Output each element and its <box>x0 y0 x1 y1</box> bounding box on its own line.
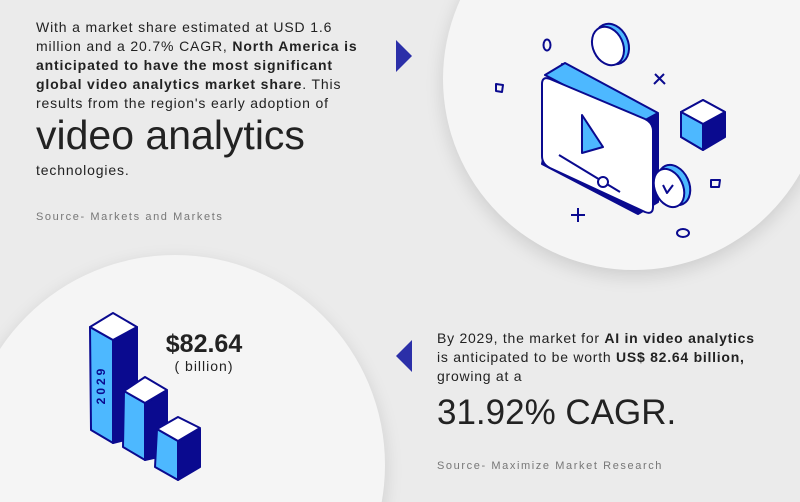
circle: bottom left <box>0 255 385 502</box>
source: Markets and Markets: Source- Markets and Markets <box>36 211 223 223</box>
text block: North America <box>36 19 358 178</box>
text block: AI in video analytics: By 2029, the market for AI in video analytics <box>437 330 755 346</box>
arrow: left pointing <box>396 340 412 372</box>
text block: North America: global video analytics market share. This <box>36 76 341 92</box>
arrow: right pointing <box>396 40 412 72</box>
chart: isometric bars <box>89 312 201 481</box>
text block: AI in video analytics: growing at a <box>437 368 522 384</box>
text block: AI in video analytics: is anticipated to be worth US$ 82.64 billion, <box>437 349 745 365</box>
text block: North America: video analytics <box>36 112 305 158</box>
text block: North America: results from the region's early adoption of technologies. <box>36 95 329 178</box>
stat: $82.64 billion: ( billion) <box>174 358 234 374</box>
circle: top right <box>443 0 800 270</box>
stat: $82.64 billion: $82.64 <box>166 330 242 358</box>
icon: video player illustration <box>495 22 726 238</box>
text block: North America: With a market share estimated at USD 1.6 <box>36 19 332 35</box>
text block: North America: anticipated to have the most significant <box>36 57 333 73</box>
source: Maximize Market Research: Source- Maximize Market Research <box>437 460 663 472</box>
text block: North America: million and a 20.7% CAGR, North America is <box>36 38 358 54</box>
text block: AI in video analytics <box>437 330 755 432</box>
text block: AI in video analytics: 31.92% CAGR. <box>437 393 676 432</box>
stat: $82.64 billion <box>166 330 242 374</box>
chart: isometric bars: 2029 <box>94 366 108 404</box>
